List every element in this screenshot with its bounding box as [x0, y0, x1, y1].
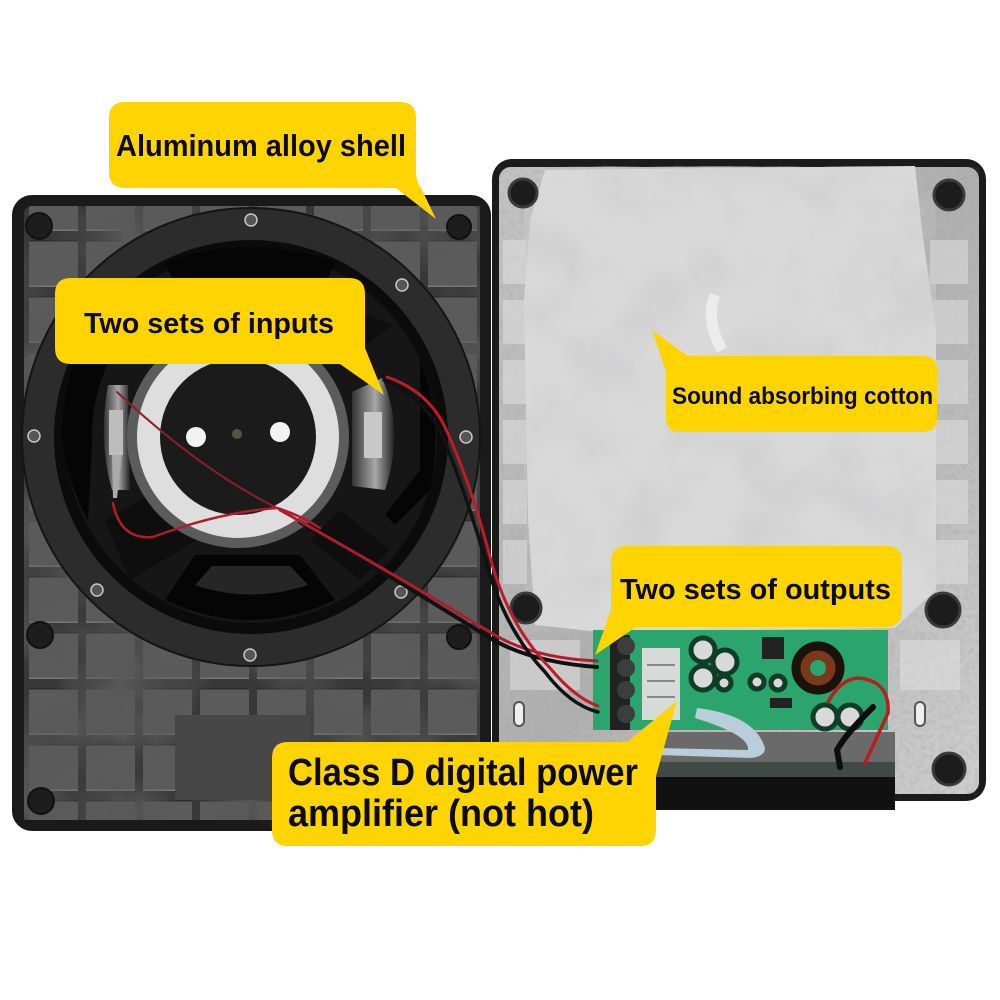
panel: speaker enclosure back (left) — [12, 195, 491, 831]
speaker terminals — [109, 410, 123, 455]
callout: Class D digital power amplifier: amplifier (not hot) — [288, 793, 594, 835]
speaker side windows with chrome frames — [104, 385, 130, 490]
panel: speaker driver — [22, 208, 480, 666]
callout: Class D digital power amplifier: Class D digital power — [288, 752, 638, 794]
callout: Two sets of inputs — [55, 278, 384, 395]
icon: corner screws left box — [26, 213, 471, 814]
callout: Sound absorbing cotton — [652, 330, 937, 432]
shell side ribs — [503, 240, 968, 690]
lower PCB and heatsink — [655, 732, 895, 810]
slots — [514, 702, 925, 726]
circuit board: amplifier — [593, 630, 888, 730]
wires: red and black speaker leads — [113, 377, 888, 767]
callout: Aluminum alloy shell: Aluminum alloy shell — [116, 128, 406, 163]
icon: corner posts right box — [509, 179, 965, 785]
speaker magnet — [127, 326, 349, 548]
callout: Class D digital power amplifier — [272, 701, 677, 846]
speaker basket windows — [62, 247, 436, 620]
speaker spokes — [105, 300, 392, 580]
callout: Two sets of outputs: Two sets of outputs — [620, 574, 891, 606]
panel: aluminum shell interior (right) — [492, 159, 986, 810]
sound absorbing cotton — [524, 166, 936, 632]
speaker mounting ring — [22, 208, 480, 666]
callout: Two sets of outputs — [595, 546, 902, 655]
ribbon cable — [657, 708, 765, 758]
callout: Sound absorbing cotton: Sound absorbing cotton — [672, 383, 933, 410]
icon: ring screws — [28, 214, 472, 661]
callout: Two sets of inputs: Two sets of inputs — [84, 308, 334, 340]
callout: Aluminum alloy shell — [109, 102, 436, 219]
